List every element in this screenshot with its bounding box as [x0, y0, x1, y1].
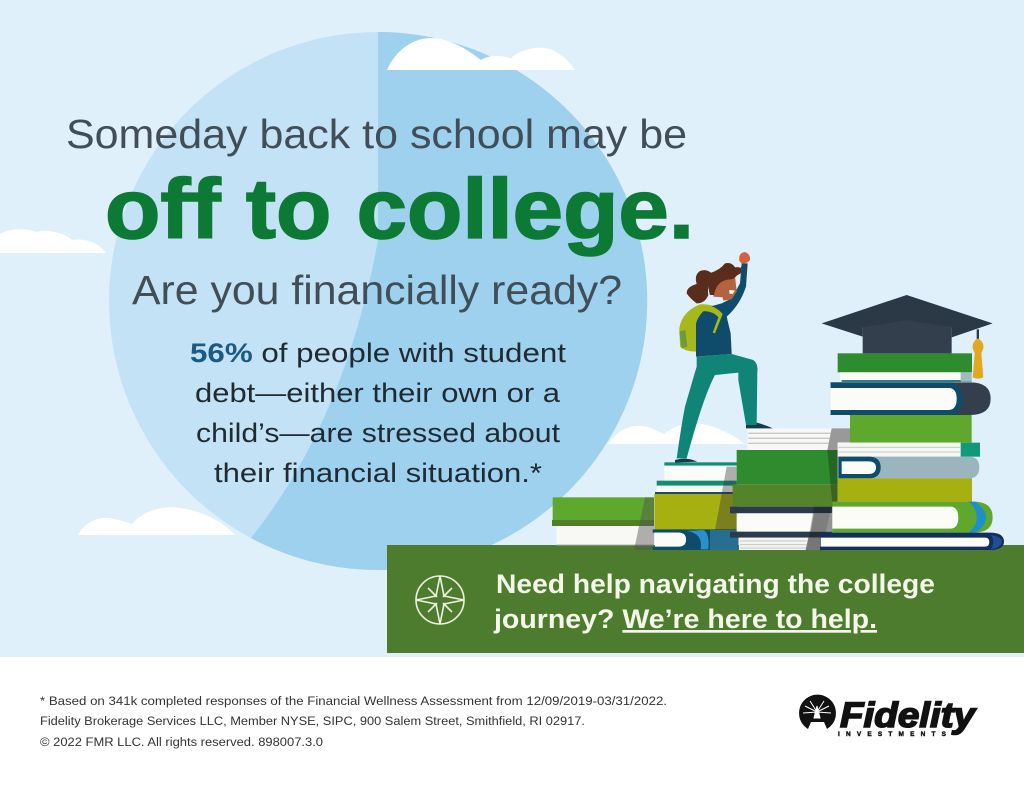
graduation cap [822, 295, 993, 379]
banner text: journey? We’re here to help. [493, 604, 877, 634]
statistic text block: debt—either their own or a [195, 378, 561, 408]
book stack: middle [730, 428, 850, 550]
Fidelity logo: INVESTMENTS [838, 731, 947, 738]
banner text [493, 569, 935, 634]
student climbing [675, 252, 773, 463]
Fidelity logo [799, 695, 977, 738]
call to action banner [387, 545, 1024, 653]
banner text: Need help navigating the college [496, 569, 935, 599]
white footer band [0, 657, 1024, 791]
cloud: left [0, 229, 106, 253]
pie chart: 56 percent [109, 32, 647, 570]
Fidelity logo: Fidelity [840, 696, 977, 735]
heading line 1: Someday back to school may be [66, 111, 687, 157]
book stack: left [552, 497, 654, 550]
cloud: lower left [78, 507, 235, 535]
heading line 2: off to college: off to college. [105, 162, 694, 256]
footnote text [40, 694, 667, 749]
book stack: right [820, 353, 1004, 550]
book stack: second [653, 462, 738, 550]
heading line 3: Are you financially ready? [132, 267, 622, 313]
footnote text: © 2022 FMR LLC. All rights reserved. 898007.3.0 [40, 735, 323, 749]
footnote text: * Based on 341k completed responses of the Financial Wellness Assessment from 12/09/2019-03/31/2022. [40, 694, 667, 708]
statistic text block: 56% of people with student [190, 338, 567, 368]
illustration: books, cap and student [552, 252, 1004, 550]
footnote text: Fidelity Brokerage Services LLC, Member NYSE, SIPC, 900 Salem Street, Smithfield, RI 02917. [40, 714, 585, 728]
cloud: top [387, 38, 575, 70]
statistic text block [190, 338, 567, 488]
icon: compass [416, 576, 464, 624]
statistic text block: child’s—are stressed about [196, 418, 561, 448]
cloud: behind climber [608, 423, 745, 444]
statistic text block: their financial situation.* [214, 458, 543, 488]
